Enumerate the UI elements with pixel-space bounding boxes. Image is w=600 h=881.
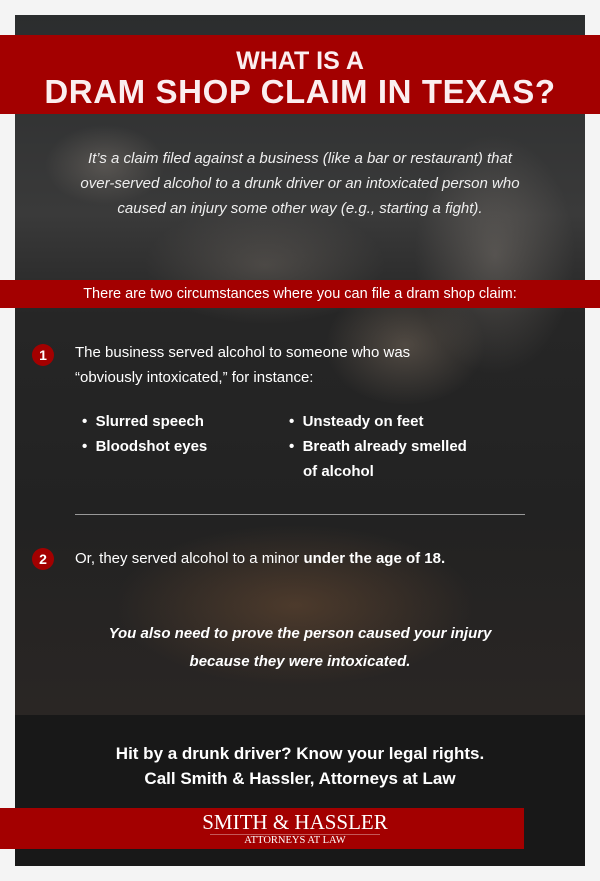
item 2: [32, 548, 445, 570]
note text: You also need to prove the person caused your injury because they were intoxicated.: [109, 625, 491, 670]
bullet list right: of alcohol: [303, 463, 374, 480]
call to action: [116, 744, 484, 788]
icon: number 2 badge: [32, 548, 54, 570]
bullet list right: [289, 413, 467, 480]
logo text: SMITH & HASSLER: [202, 810, 388, 834]
bullet list left: [82, 413, 207, 455]
icon: number 1 badge: [32, 344, 54, 366]
item 2 text: Or, they served alcohol to a minor under the age of 18.: [75, 550, 445, 567]
title band: DRAM SHOP CLAIM IN TEXAS?: [44, 73, 556, 110]
item 1: [32, 344, 467, 480]
title band: [0, 35, 600, 114]
logo band: [0, 808, 524, 849]
panel: footer dark: [15, 715, 585, 866]
item 1 text: The business served alcohol to someone who was “obviously intoxicated,” for instance:: [75, 344, 410, 386]
bullet list left: • Slurred speech: [82, 413, 204, 430]
bullet list right: • Unsteady on feet: [289, 413, 423, 430]
bullet list left: • Bloodshot eyes: [82, 438, 207, 455]
subheading band: There are two circumstances where you can file a dram shop claim:: [83, 286, 517, 302]
icon: number 2 badge: 2: [39, 551, 47, 567]
logo band: ATTORNEYS AT LAW: [244, 835, 346, 846]
subheading band: [0, 280, 600, 308]
panel: background photo: [15, 15, 585, 715]
bullet list right: • Breath already smelled: [289, 438, 467, 455]
intro text: It’s a claim filed against a business (like a bar or restaurant) that over-served alcohol to a drunk driver or an intoxicated person who caused an injury some other way (e.g., starting a fight).: [80, 150, 520, 217]
call to action: Call Smith & Hassler, Attorneys at Law: [144, 769, 456, 788]
title band: WHAT IS A: [236, 47, 364, 75]
call to action: Hit by a drunk driver? Know your legal rights.: [116, 744, 484, 763]
icon: number 1 badge: 1: [39, 347, 47, 363]
